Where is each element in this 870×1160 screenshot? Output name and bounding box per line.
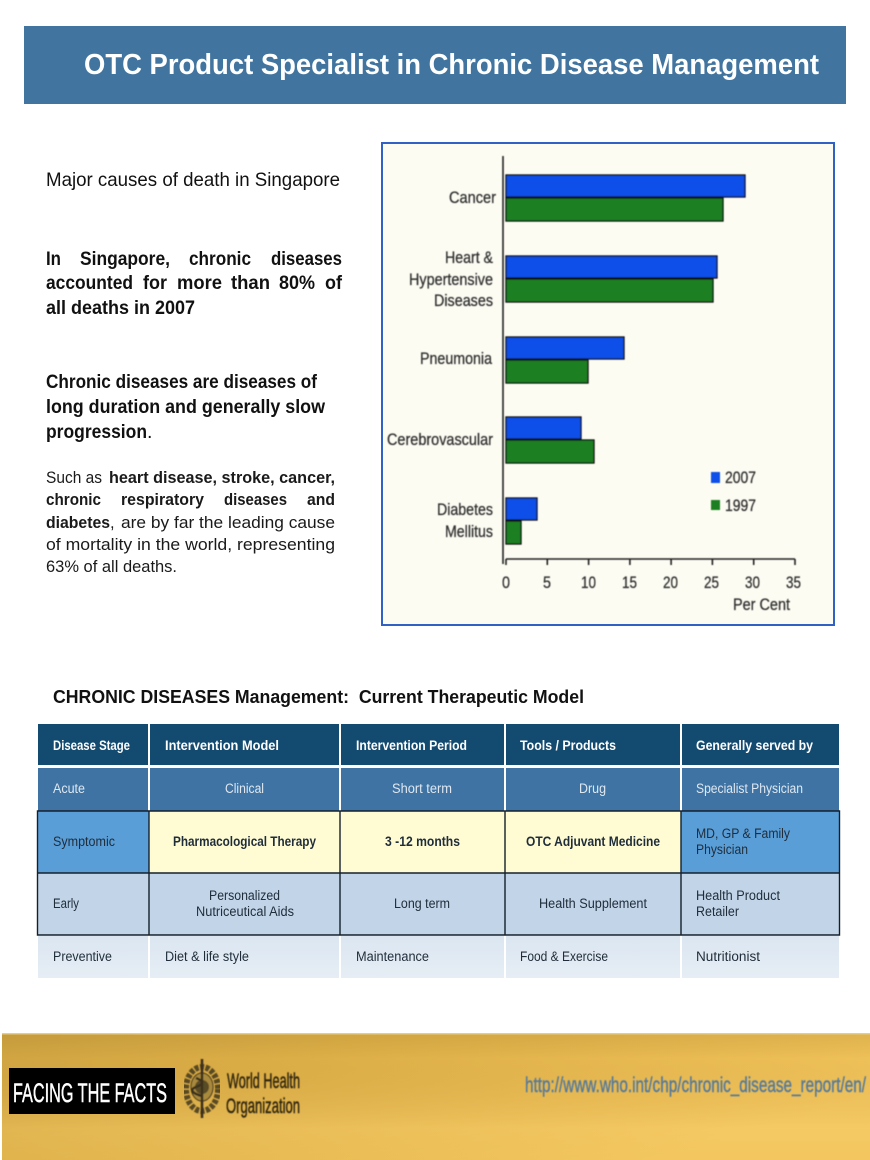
axis tick labels: 0 — [502, 574, 510, 592]
axis tick labels — [502, 574, 801, 592]
text: Singapore chronic disease statement: accounted — [46, 272, 133, 294]
table row: Preventive: Food & Exercise — [520, 949, 608, 964]
table row: Symptomic: Symptomic — [53, 834, 115, 849]
table row: Symptomic: 3 -12 months — [385, 834, 460, 849]
panel: left text column — [46, 169, 347, 576]
text: leading cause of mortality: heart disease, stroke, cancer, — [109, 469, 335, 487]
axis title: Per Cent — [733, 596, 790, 614]
category labels: Heart & — [445, 249, 493, 267]
category labels — [387, 189, 496, 541]
table row: Preventive: Diet & life style — [165, 949, 249, 964]
text: Singapore chronic disease statement: more — [177, 272, 222, 294]
text: leading cause of mortality: respiratory — [121, 491, 205, 509]
text: leading cause of mortality: , — [110, 514, 115, 532]
bars: Cancer — [506, 175, 745, 221]
text: Singapore chronic disease statement: of — [325, 272, 342, 294]
table row: Acute: Specialist Physician — [696, 781, 803, 796]
table row: Early: Retailer — [696, 904, 739, 919]
table header row: Intervention Model — [165, 738, 279, 753]
table row: Early: Early — [53, 896, 79, 911]
category labels: Diabetes — [437, 501, 493, 519]
bars: Pneumonia — [506, 337, 624, 383]
legend — [711, 469, 756, 515]
axis tick labels: 25 — [704, 574, 719, 592]
table row: Early: Health Product — [696, 888, 780, 903]
text: chronic disease definition: progression — [46, 421, 147, 443]
highlighted rows outline — [38, 811, 840, 935]
table header row: Tools / Products — [520, 738, 616, 753]
axis tick labels: 5 — [543, 574, 551, 592]
title: OTC Product Specialist in Chronic Disease Management — [84, 49, 819, 81]
text: leading cause of mortality: Such as — [46, 469, 102, 487]
table row: Acute — [38, 768, 839, 811]
table row: Symptomic: Pharmacological Therapy — [173, 834, 316, 849]
legend: 2007 — [725, 469, 756, 487]
axis tick labels: 15 — [622, 574, 637, 592]
text: Singapore chronic disease statement: 80% — [279, 272, 315, 294]
footer band — [2, 1033, 870, 1160]
category labels: Diseases — [434, 292, 493, 310]
table row: Early — [38, 873, 839, 935]
text: leading cause of mortality: 63% of all deaths. — [46, 558, 177, 576]
bars: Cerebrovascular — [506, 417, 594, 463]
table row: Preventive: Preventive — [53, 949, 112, 964]
text: leading cause of mortality: and — [307, 491, 335, 509]
text: leading cause of mortality: diseases — [224, 491, 287, 509]
text: Singapore chronic disease statement: Singapore, — [80, 248, 170, 270]
bars: Heart and Hypertensive Diseases — [506, 256, 717, 302]
table: current therapeutic model — [38, 724, 840, 978]
table row: Symptomic — [38, 811, 839, 873]
table header row: Generally served by — [696, 738, 813, 753]
axis tick labels: 35 — [786, 574, 801, 592]
axis tick labels: 10 — [581, 574, 596, 592]
text: leading cause of mortality: chronic — [46, 491, 101, 509]
bar chart: major causes of death — [387, 156, 801, 614]
category labels: Hypertensive — [409, 271, 493, 289]
text: leading cause of mortality: diabetes — [46, 514, 110, 532]
table row: Symptomic: Physician — [696, 842, 748, 857]
bars: Diabetes Mellitus — [506, 498, 537, 544]
text: chronic disease definition: . — [147, 421, 152, 443]
table row: Acute: Short term — [392, 781, 452, 796]
axis tick labels: 30 — [745, 574, 760, 592]
table header row: Disease Stage — [53, 738, 130, 753]
text: Singapore chronic disease statement: diseases — [271, 248, 342, 270]
footer badge: Facing the Facts: FACING THE FACTS — [13, 1078, 167, 1108]
legend: 1997 — [725, 497, 756, 515]
text: Singapore chronic disease statement: all deaths in 2007 — [46, 297, 195, 319]
table row: Acute: Clinical — [225, 781, 264, 796]
text: chronic disease definition: Chronic diseases are diseases of — [46, 371, 317, 393]
logo text: World Health Organization: World Health — [227, 1070, 300, 1093]
heading: therapeutic model: CHRONIC DISEASES Management: Current Therapeutic Model — [53, 686, 584, 707]
category labels: Cancer — [449, 189, 496, 207]
table row: Preventive — [38, 936, 839, 978]
title banner — [24, 26, 846, 104]
axis tick labels: 20 — [663, 574, 678, 592]
text: leading cause of mortality: of mortality in the world, representing — [46, 536, 335, 554]
icon: WHO emblem — [186, 1059, 218, 1118]
text: Singapore chronic disease statement: for — [143, 272, 167, 294]
table header row: Intervention Period — [356, 738, 467, 753]
table row: Acute: Drug — [579, 781, 606, 796]
table row: Acute: Acute — [53, 781, 85, 796]
footer badge: Facing the Facts — [9, 1068, 175, 1114]
category labels: Pneumonia — [420, 350, 493, 368]
table row: Symptomic: MD, GP & Family — [696, 826, 790, 841]
panel: bar chart frame — [382, 143, 834, 625]
table row: Early: Personalized — [209, 888, 280, 903]
category labels: Mellitus — [445, 523, 493, 541]
text: Singapore chronic disease statement: In — [46, 248, 61, 270]
text: Singapore chronic disease statement: chronic — [189, 248, 251, 270]
text: leading cause of mortality: are by far the leading cause — [121, 514, 335, 532]
category labels: Cerebrovascular — [387, 431, 493, 449]
table row: Preventive: Nutritionist — [696, 949, 760, 964]
table row: Early: Long term — [394, 896, 450, 911]
table row: Symptomic: OTC Adjuvant Medicine — [526, 834, 660, 849]
axes — [503, 156, 795, 565]
table row: Early: Nutriceutical Aids — [196, 904, 294, 919]
text: chart caption: Major causes of death in Singapore — [46, 169, 340, 191]
table row: Preventive: Maintenance — [356, 949, 429, 964]
logo text: World Health Organization: Organization — [226, 1095, 300, 1118]
text: chronic disease definition: long duration and generally slow — [46, 396, 326, 418]
logo text: World Health Organization — [226, 1070, 300, 1118]
table header row — [38, 724, 839, 765]
table row: Early: Health Supplement — [539, 896, 647, 911]
text: Singapore chronic disease statement: than — [231, 272, 270, 294]
